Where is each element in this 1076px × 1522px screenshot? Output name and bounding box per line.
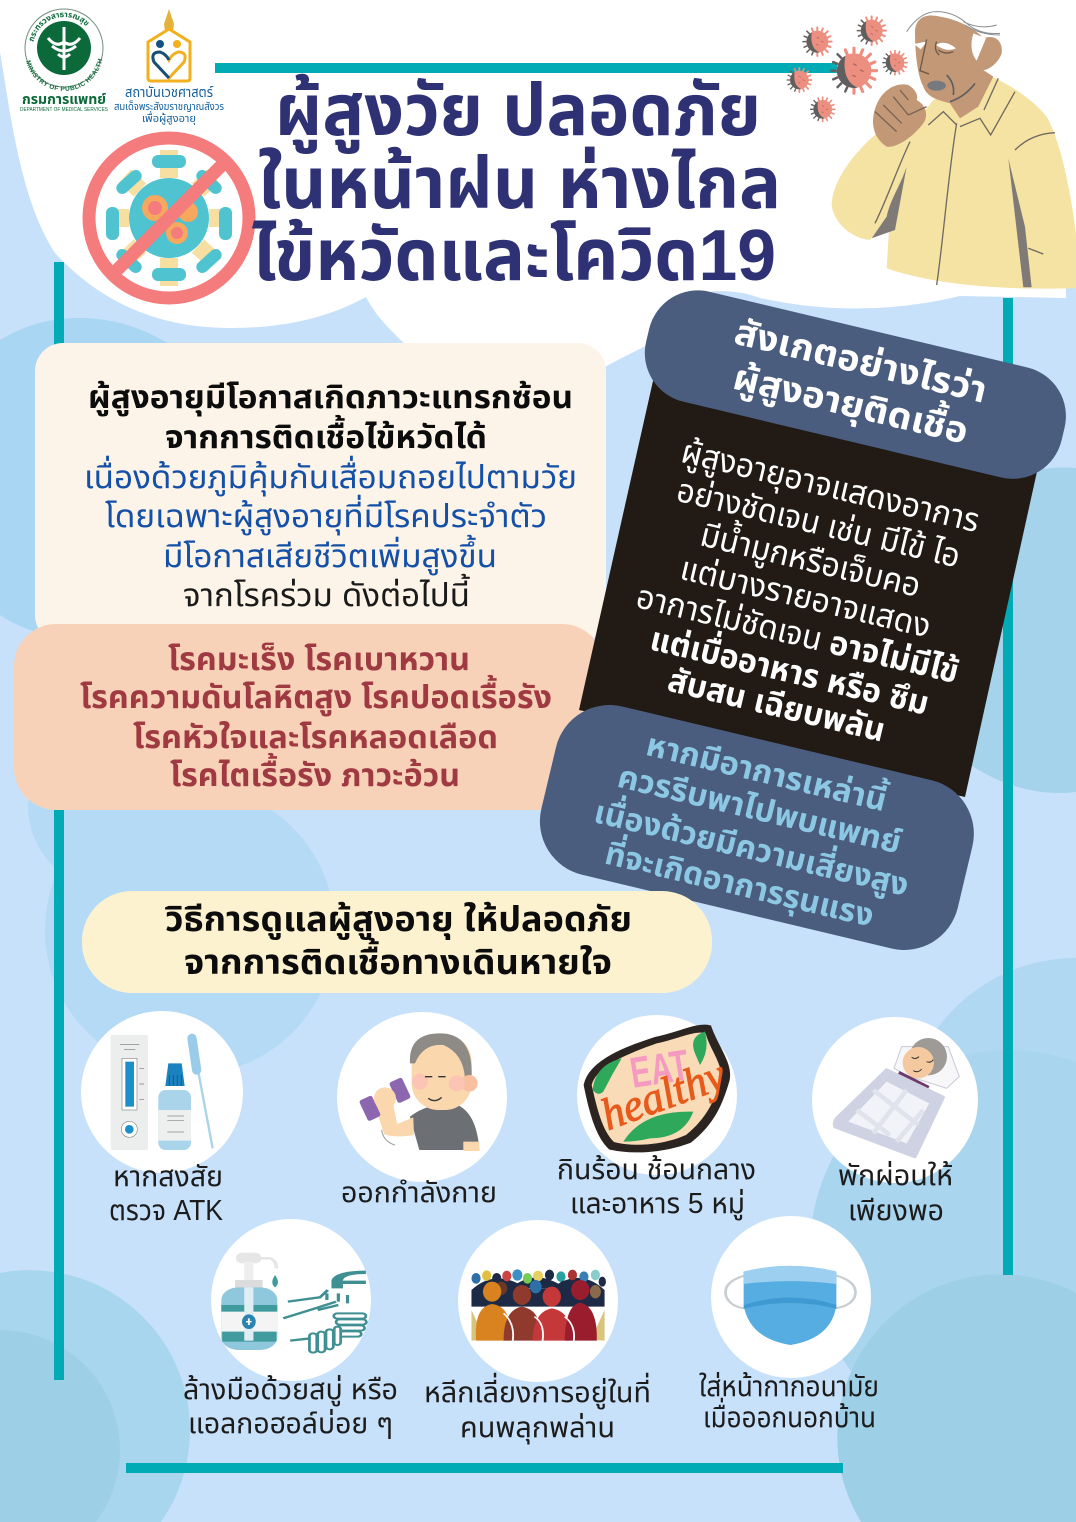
- illustration: coughing elderly man with viruses: [787, 12, 1076, 289]
- logo: department of medical services: กรมการแพทย์: [22, 91, 106, 107]
- label: rest: [838, 1160, 953, 1227]
- panel: risk explanation: [35, 343, 606, 643]
- panel: see a doctor advice: เนื่องด้วยมีความเสี่ยงสูง: [591, 788, 914, 904]
- label: mask: ใส่หน้ากากอนามัย: [699, 1371, 879, 1403]
- text: risk detail: โดยเฉพาะผู้สูงอายุที่มีโรคประจำตัว: [105, 494, 547, 536]
- icon: crossed-out virus: [89, 138, 249, 298]
- logo: department of medical services: [20, 8, 109, 113]
- title: ไข้หวัดและโควิด19: [252, 216, 776, 296]
- text: symptoms description: [633, 432, 983, 749]
- panel: symptoms heading: ผู้สูงอายุติดเชื้อ: [729, 351, 974, 453]
- logo: department of medical services: MINISTRY OF PUBLIC HEALTH: [26, 58, 102, 91]
- label: rest: เพียงพอ: [848, 1195, 944, 1227]
- text: disease list: [80, 641, 552, 793]
- heading: how to care: จากการติดเชื้อทางเดินหายใจ: [184, 937, 612, 982]
- text: risk heading: [88, 379, 573, 455]
- title: ในหน้าฝน ห่างไกล: [258, 144, 781, 224]
- text: symptoms description: แต่เบื่ออาหาร หรือ ซึม: [647, 615, 934, 722]
- label: ATK: หากสงสัย: [113, 1161, 223, 1193]
- icon: face mask: [711, 1216, 871, 1378]
- text: disease list: โรคหัวใจและโรคหลอดเลือด: [133, 719, 498, 755]
- label: hand washing: ล้างมือด้วยสบู่ หรือ: [183, 1374, 398, 1407]
- panel: see a doctor advice: ควรรีบพาไปพบแพทย์: [614, 758, 905, 860]
- label: rest: พักผ่อนให้: [838, 1160, 953, 1192]
- label: hand washing: แอลกอฮอล์บ่อย ๆ: [188, 1408, 393, 1440]
- panel: see a doctor advice: หากมีอาการเหล่านี้: [643, 721, 892, 819]
- panel: comorbidities: [14, 624, 604, 810]
- text: risk heading: ผู้สูงอายุมีโอกาสเกิดภาวะแทรกซ้อน: [88, 379, 573, 416]
- heading: how to care: [82, 891, 712, 993]
- text: risk closing line: จากโรคร่วม ดังต่อไปนี้: [183, 573, 470, 613]
- text: risk detail: มีโอกาสเสียชีวิตเพิ่มสูงขึ้น: [163, 534, 497, 576]
- heading: how to care: วิธีการดูแลผู้สูงอายุ ให้ปลอดภัย: [165, 900, 632, 940]
- text: risk detail: เนื่องด้วยภูมิคุ้มกันเสื่อมถอยไปตามวัย: [84, 455, 577, 497]
- text: symptoms description: อย่างชัดเจน เช่น มีไข้ ไอ: [673, 471, 964, 574]
- label: hand washing: [183, 1374, 398, 1440]
- icon: eat healthy: healthy: [594, 1049, 732, 1140]
- text: risk detail: [84, 455, 577, 576]
- icon: eat healthy: EAT: [627, 1041, 692, 1098]
- label: exercise: ออกกำลังกาย: [341, 1177, 497, 1209]
- text: risk heading: จากการติดเชื้อไข้หวัดได้: [165, 414, 487, 455]
- logo: department of medical services: DEPARTMENT OF MEDICAL SERVICES: [20, 107, 109, 113]
- logo: institute of geriatric medicine: [114, 9, 224, 125]
- label: eat: กินร้อน ช้อนกลาง: [557, 1154, 756, 1186]
- label: mask: เมื่อออกนอกบ้าน: [703, 1397, 876, 1434]
- text: disease list: โรคความดันโลหิตสูง โรคปอดเรื้อรัง: [80, 674, 552, 716]
- panel: symptoms heading: สังเกตอย่างไรว่า: [731, 311, 991, 411]
- label: crowd: คนพลุกพล่าน: [460, 1412, 615, 1444]
- text: symptoms description: แต่บางรายอาจแสดง: [677, 549, 934, 644]
- label: mask: [699, 1371, 879, 1434]
- label: eat: และอาหาร 5 หมู่: [570, 1188, 745, 1221]
- text: symptoms description: มีน้ำมูกหรือเจ็บคอ: [696, 512, 925, 606]
- icon: eat healthy: [577, 1015, 737, 1175]
- icon: ATK test: [81, 1011, 243, 1173]
- label: eat: [557, 1154, 756, 1221]
- icon: rest in bed: [812, 1017, 978, 1183]
- text: symptoms description: ผู้สูงอายุอาจแสดงอาการ: [678, 432, 983, 541]
- logo: department of medical services: กระทรวงสาธารณสุข: [30, 12, 89, 42]
- label: crowd: [424, 1372, 651, 1444]
- text: symptoms description: อาการไม่ชัดเจน อาจไม่มีไข้: [633, 578, 962, 690]
- title: ผู้สูงวัย ปลอดภัย: [275, 71, 761, 154]
- panel: symptoms body: [579, 372, 1040, 797]
- label: ATK: ตรวจ ATK: [109, 1195, 224, 1227]
- icon: exercise: [337, 1012, 507, 1182]
- panel: symptoms heading: [635, 280, 1076, 489]
- panel: see a doctor advice: [529, 694, 985, 961]
- panel: see a doctor advice: ที่จะเกิดอาการรุนแรง: [601, 830, 879, 935]
- logo: institute of geriatric medicine: สถาบันเวชศาสตร์: [125, 84, 214, 100]
- logo: institute of geriatric medicine: สมเด็จพระสังฆราชญาณสังวร: [114, 100, 224, 113]
- text: disease list: โรคไตเรื้อรัง ภาวะอ้วน: [170, 752, 460, 793]
- label: ATK: [109, 1161, 224, 1227]
- label: crowd: หลีกเลี่ยงการอยู่ในที่: [424, 1372, 651, 1410]
- text: symptoms description: สับสน เฉียบพลัน: [664, 661, 889, 749]
- title: [252, 71, 781, 296]
- logo: institute of geriatric medicine: เพื่อผู้สูงอายุ: [142, 110, 196, 125]
- icon: crowd: [458, 1220, 618, 1382]
- icon: hand washing: [211, 1219, 371, 1381]
- text: disease list: โรคมะเร็ง โรคเบาหวาน: [168, 641, 470, 677]
